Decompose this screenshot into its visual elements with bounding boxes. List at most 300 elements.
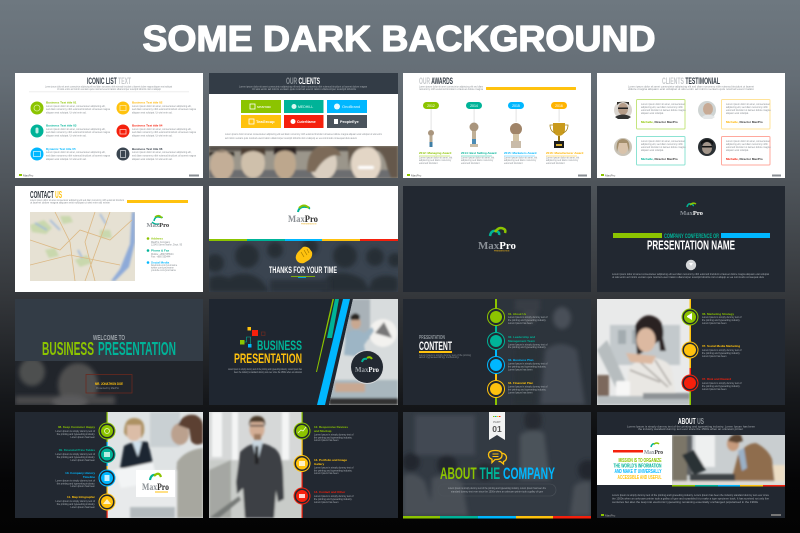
- panel: business presentation: [209, 299, 398, 405]
- mission panel: MISSION IS TO ORGANIZE: [618, 458, 662, 464]
- heading: business: BUSINESS: [257, 337, 302, 353]
- item 04: Lorem Ipsum is simply dummy text of: [508, 386, 548, 388]
- list item: teal: [30, 124, 111, 138]
- item 10: 10. Company History: [65, 471, 95, 475]
- award 2012: euismod tincidunt: [419, 162, 438, 165]
- item 11: Lorem Ipsum is simply dummy text of: [56, 500, 95, 503]
- list item: dark: aliquam erat volutpat. Ut wisi enim ad.: [132, 158, 173, 161]
- body text: Lorem Ipsum is simply dummy text of the printing and typesetting industry. Lorem Ipsum has: [228, 368, 303, 371]
- testimonial: blonde woman: aliquam erat volutpat.: [641, 149, 664, 152]
- item 10: the printing and typesetting industry.: [57, 482, 95, 486]
- intro text: Lorem ipsum dolor sit amet consectetur adipiscing elit sed diam nonummy nibh euismod tincidunt ut laoreet dolore magna aliquam erat volutpat: [45, 86, 172, 88]
- intro text: [239, 86, 368, 91]
- icon: circle badge: [686, 260, 696, 270]
- client logos: OnoBrand: [342, 104, 360, 109]
- logo badge: [350, 350, 384, 384]
- award 2015: Lorem ipsum dolor sit amet, elit: [504, 156, 538, 160]
- item 13: the printing and typesetting industry.: [314, 470, 353, 472]
- item 02: the printing and typesetting industry.: [508, 346, 547, 349]
- list item: green: [30, 100, 111, 114]
- item 13: Lorem Ipsum has been: [314, 472, 339, 475]
- colour strip: [403, 516, 591, 518]
- colour strip: [672, 485, 785, 486]
- mission panel: MaxPro: [644, 450, 663, 456]
- testimonial: man drinking: Michelle, Director MaxPro: [726, 120, 763, 124]
- item 03: Lorem Ipsum is simply dummy text of: [508, 362, 548, 366]
- award 2015: 2015: [512, 104, 520, 108]
- intro text: Lorem ipsum dolor sit amet consectetur adipiscing elit sed diam nonummy nibh euismod tincidunt ut laoreet: [628, 86, 754, 88]
- timeline line: [495, 299, 497, 405]
- client logos: seamac: [257, 104, 271, 109]
- icon: chat bubbles: [488, 450, 506, 464]
- contact details: youtube.com/yourname: [151, 269, 177, 272]
- photo: meeting background: [402, 409, 598, 516]
- logo box: MaxPro: [142, 482, 169, 492]
- list item: red: [116, 124, 197, 138]
- heading: about us: ABOUT US: [678, 417, 704, 426]
- item 11: 11. Map Infographic: [67, 495, 95, 499]
- title: SOME DARK BACKGROUND: [142, 18, 656, 59]
- panel: about the company: [402, 409, 598, 518]
- logo: maxpro: [146, 216, 169, 229]
- list item: dark: Business Text title 06: [132, 147, 163, 151]
- award 2016: [546, 102, 584, 165]
- logo: maxpro: MaxPro: [478, 241, 516, 252]
- logo box: [136, 470, 175, 497]
- icon: clapping hands: [296, 247, 312, 263]
- heading: contact us: CONTACT US: [30, 190, 62, 201]
- item 01: [488, 308, 548, 326]
- mission panel: THE WORLD'S INFORMATION: [614, 464, 662, 470]
- testimonial: dark portrait man: euismod tincidunt ut laoreet dolore magna: [726, 146, 771, 149]
- photo: man on phone with laptop: [672, 434, 785, 485]
- intro text: [628, 86, 755, 91]
- award 2016: 2016: Manufacturer Award: [546, 151, 584, 155]
- intro text: [30, 199, 124, 204]
- award 2014: 2014: [470, 104, 478, 108]
- item 10: [56, 470, 115, 488]
- testimonial: dark portrait man: [698, 136, 771, 165]
- testimonial: dark portrait man: aliquam erat volutpat.: [726, 149, 749, 152]
- item 07: [682, 342, 742, 358]
- panel: contact us: [15, 186, 203, 292]
- heading: iconic list text: ICONIC LIST TEXT: [87, 76, 131, 86]
- contact details: [147, 236, 183, 272]
- item 07: 07. Social Media Marketing: [702, 344, 740, 348]
- item 10: Lorem Ipsum has been: [71, 485, 96, 488]
- award 2016: adipiscing sed diam nonummy: [546, 159, 579, 162]
- footer logo: MaxPro: [605, 174, 616, 178]
- panel: logo slide: [403, 186, 591, 292]
- list item: red: Business Text title 04: [132, 124, 163, 128]
- logo: maxpro: MaxPro: [146, 222, 169, 229]
- panel: iconic list text: [15, 73, 203, 178]
- item 10: Timeline: [83, 475, 95, 479]
- award 2015: 2015: Marketers Award: [504, 151, 537, 155]
- item 06: [682, 309, 742, 325]
- item 06: Lorem Ipsum has been: [702, 322, 727, 325]
- divider line: [106, 412, 108, 518]
- logo: maxpro: PRESENTATION: [301, 222, 317, 226]
- intro text: Ut wisi enim ad minim veniam quis nostrud exerci tation ullamcorper suscipit lobortis nisl ut aliquip: [57, 88, 162, 91]
- icon: squares: [240, 327, 265, 348]
- item 13: Gallery: [314, 462, 325, 466]
- award 2012: 2012: Managing Award: [419, 151, 452, 155]
- body text: the 1500s when an unknown printer took a galley of type and scrambled it to make a type specimen book. It has survived not only five: [612, 498, 770, 500]
- award 2012: 2012: [427, 104, 435, 108]
- panel: about us: [597, 412, 785, 518]
- intro text: [45, 86, 172, 91]
- contact details: Fax: +880 555444: [151, 256, 171, 258]
- contact details: 12345 Street Name, Dept. 95: [151, 244, 183, 246]
- item 08: the printing and typesetting industry.: [702, 385, 741, 388]
- panel: clients testimonial: [597, 73, 785, 178]
- testimonial: man with glasses: aliquam erat volutpat.: [641, 112, 664, 115]
- list item: yellow: Lorem ipsum dolor sit amet, consectetuer adipiscing elit,: [132, 105, 192, 108]
- list item: red: aliquam erat volutpat. Ut wisi enim ad.: [132, 134, 173, 138]
- heading: presentation content: [419, 335, 472, 359]
- testimonial: man with glasses: euismod tincidunt ut laoreet dolore magna: [641, 109, 686, 112]
- logo: maxpro: PRESENTATION: [494, 250, 510, 252]
- contact details: facebook.com/yourname: [151, 264, 178, 267]
- heading: presentation content: Lorem Ipsum is simply dummy text of the printing: [419, 354, 472, 357]
- item 14: Lorem Ipsum is simply dummy text of: [314, 495, 354, 498]
- footer logo: MaxPro: [411, 174, 422, 178]
- logo: maxpro: [680, 203, 703, 217]
- heading: thanks: THANKS FOR YOUR TIME: [269, 265, 337, 276]
- item 01: 01. About Us: [508, 312, 527, 316]
- list item: green: Business Text title 01: [46, 100, 77, 104]
- text: welcome to: WELCOME TO: [93, 333, 125, 342]
- client logos: MEDHILL: [298, 105, 313, 109]
- list item: green: Lorem ipsum dolor sit amet, consectetuer adipiscing elit,: [46, 105, 106, 108]
- item 02: 02. Leadership and: [508, 335, 535, 339]
- testimonial: man drinking: euismod tincidunt ut laoreet dolore magna: [726, 109, 771, 112]
- item 03: 03. Business Plan: [508, 358, 534, 362]
- item 03: [488, 356, 548, 374]
- panel: responsive devices: [209, 412, 398, 518]
- award 2015: euismod tincidunt: [504, 162, 523, 165]
- photo: businessman: [209, 412, 302, 518]
- divider line: [302, 412, 303, 518]
- list item: blue: [30, 147, 111, 161]
- panel: thanks for your time: [206, 186, 402, 292]
- contact details: Social Media: [151, 260, 170, 264]
- list item: blue: Lorem ipsum dolor sit amet, consectetuer adipiscing elit,: [46, 151, 106, 154]
- presenter box: MR. JONATHON DOE: [95, 382, 123, 386]
- list item: teal: sed diam nonummy nibh euismod tincidunt ut laoreet magna: [46, 131, 111, 134]
- item 08: [56, 423, 115, 439]
- item 08: [682, 375, 742, 391]
- bar: blue: [721, 233, 770, 238]
- panel: welcome: [15, 299, 203, 409]
- award 2012: adipiscing sed diam nonummy: [419, 159, 452, 162]
- panel: presentation content: [403, 299, 591, 405]
- item 11: [56, 494, 115, 510]
- mission panel: ACCESSIBLE AND USEFUL: [618, 475, 662, 481]
- logo: maxpro: MaxPro: [680, 210, 703, 217]
- logo badge: MaxPro: [355, 366, 379, 374]
- item 02: [488, 332, 548, 350]
- panel: our awards: [403, 73, 591, 178]
- mission panel: AND MAKE IT UNIVERSALLY: [614, 469, 662, 475]
- award 2012: Lorem ipsum dolor sit amet, elit: [419, 156, 453, 160]
- testimonial: man drinking: adipiscing elit, sed diam nonummy nibh: [726, 106, 768, 109]
- award 2014: Lorem ipsum dolor sit amet, elit: [461, 156, 495, 160]
- logo: maxpro: [478, 228, 516, 252]
- intro text: [419, 86, 484, 91]
- item 12: [294, 423, 354, 442]
- text pill: [438, 484, 556, 496]
- testimonial: dark portrait man: Lorem ipsum dolor sit amet, consectetuer: [726, 140, 770, 143]
- heading: about the company: ABOUT THE COMPANY: [440, 464, 555, 483]
- body text: [228, 368, 303, 374]
- contact details: twitter.com/yourname: [151, 266, 174, 270]
- contact details: Phone & Fax: [151, 248, 170, 252]
- item 09: 09. Financial Price Tables: [59, 448, 95, 452]
- intro text: Lorem Ipsum is simply dummy text of the printing and typesetting industry. Lorem Ipsum has been: [627, 426, 756, 428]
- testimonial: dark portrait man: Michelle, Director MaxPro: [726, 157, 763, 161]
- testimonial: man with glasses: adipiscing elit, sed diam nonummy nibh: [641, 106, 683, 109]
- item 11: Lorem Ipsum has been: [71, 506, 96, 509]
- item 10: Lorem Ipsum is simply dummy text of: [56, 480, 95, 482]
- item 08: Lorem Ipsum is simply dummy text of: [702, 382, 742, 385]
- photo: woman at desk: [597, 299, 690, 405]
- list item: green: sed diam nonummy nibh euismod tincidunt ut laoreet magna: [46, 108, 111, 111]
- map: [30, 212, 135, 281]
- bar: green: [613, 233, 662, 238]
- testimonial: blonde woman: Lorem ipsum dolor sit amet, consectetuer: [641, 140, 685, 143]
- heading: our awards: OUR AWARDS: [419, 76, 453, 86]
- award 2015: [504, 102, 538, 165]
- item 13: [294, 456, 354, 475]
- intro text: Ut wisi enim ad minim veniam quis nostrud exerci tation ullamcorper suscipit lobortis: [252, 88, 357, 91]
- presenter box: [86, 374, 132, 393]
- contact details: MaxPro Company: [151, 241, 171, 244]
- intro text: nonummy nibh euismod tincidunt ut laoreet dolore magna: [419, 88, 484, 91]
- list item: yellow: [116, 100, 197, 114]
- body text: been the industry's standard dummy text ever since the 1500s when an unknown: [234, 371, 303, 374]
- award 2016: Lorem ipsum dolor sit amet, elit: [546, 156, 580, 160]
- client logos: CuterName: [297, 120, 316, 124]
- item 13: 13. Portfolio and Image: [314, 458, 347, 462]
- photo: thinking man: [15, 361, 117, 405]
- testimonial: man drinking: aliquam erat volutpat.: [726, 112, 749, 115]
- heading: clients testimonial: CLIENTS TESTIMONIAL: [662, 76, 720, 86]
- testimonial: man drinking: [698, 100, 771, 129]
- footer logo: MaxPro: [23, 174, 34, 178]
- body text: Lorem ipsum dolor sit amet consectetuer adipiscing elit sed diam nonummy nibh euismod tincidunt ut laoreet dolore magna aliquam erat volutpat: [612, 273, 769, 276]
- client logos: TeaGroup: [256, 119, 275, 124]
- item 03: Lorem Ipsum has been: [508, 368, 533, 372]
- yellow title bar: [486, 87, 576, 90]
- stripe: green: [316, 299, 334, 372]
- item 08: Lorem Ipsum has been: [71, 436, 96, 439]
- panel: customers meeting: [15, 412, 203, 518]
- item 12: Lorem Ipsum has been: [314, 439, 339, 442]
- testimonial: dark portrait man: adipiscing elit, sed diam nonummy nibh: [726, 143, 768, 146]
- testimonial: blonde woman: euismod tincidunt ut laoreet dolore magna: [641, 146, 686, 149]
- contact details: Address: [151, 236, 163, 240]
- item 06: the printing and typesetting industry.: [702, 319, 741, 322]
- body text: Lorem Ipsum is simply dummy text of the printing and typesetting industry. Lorem Ipsum has been the industry standard dummy text ever since: [612, 494, 770, 497]
- list item: dark: sed diam nonummy nibh euismod tincidunt ut laoreet magna: [132, 154, 197, 158]
- item 12: 12. Responsive Devices: [314, 425, 348, 429]
- list item: teal: Lorem ipsum dolor sit amet, consectetuer adipiscing elit,: [46, 128, 106, 131]
- item 04: [488, 380, 548, 398]
- panel: marketing strategy: [597, 299, 785, 405]
- testimonial: man with glasses: Lorem ipsum dolor sit amet, consectetuer: [641, 103, 685, 106]
- panel: presentation name: [597, 186, 785, 292]
- item 07: the printing and typesetting industry.: [702, 352, 741, 355]
- item 06: 06. Marketing Strategy: [702, 312, 734, 316]
- item 04: the printing and typesetting industry.: [508, 388, 547, 392]
- item 02: Management Team: [508, 339, 535, 343]
- heading: our clients: OUR CLIENTS: [286, 76, 320, 86]
- item 08: 07. Risk and Reward: [702, 377, 731, 381]
- item 09: [56, 446, 115, 462]
- award 2014: 2014: Best Selling Award: [461, 151, 497, 155]
- item 11: the printing and typesetting industry.: [57, 503, 95, 506]
- intro text: ut laoreet dolore magna aliquam erat volutpat ut wisi enim ad minim: [30, 202, 110, 204]
- stripe: teal: [327, 299, 339, 338]
- intro text: dolore magna aliquam erat volutpat ut wisi enim ad minim veniam quis nostrud exerci tation: [628, 88, 755, 91]
- item 01: the printing and typesetting industry.: [508, 319, 547, 322]
- list item: yellow: sed diam nonummy nibh euismod tincidunt ut laoreet magna: [132, 108, 197, 111]
- photo: audience: [206, 239, 402, 292]
- testimonial: blonde woman: [614, 136, 686, 165]
- award 2014: adipiscing sed diam nonummy: [461, 159, 494, 162]
- mission panel: [597, 435, 672, 485]
- heading: presentation: PRESENTATION: [98, 339, 176, 359]
- list item: green: aliquam erat volutpat. Ut wisi enim ad.: [46, 112, 87, 114]
- item 01: Lorem Ipsum has been: [508, 322, 533, 325]
- text pill: Lorem Ipsum is simply dummy text of the printing and typesetting industry. Lorem Ipsum has been the: [448, 487, 547, 490]
- item 08: the printing and typesetting industry.: [57, 433, 95, 436]
- heading: presentation: PRESENTATION: [234, 350, 302, 366]
- photo: presenter: [329, 299, 398, 405]
- item 14: the printing and typesetting industry.: [314, 498, 353, 501]
- award 2016: 2016: [555, 104, 563, 108]
- yellow title bar: [127, 200, 188, 203]
- body text: centuries but also the leap into electronic typesetting remaining essentially unchanged popularised in the 1960s: [612, 501, 759, 504]
- testimonial: blonde woman: adipiscing elit, sed diam nonummy nibh: [641, 143, 683, 146]
- award 2016: euismod tincidunt: [546, 162, 565, 165]
- list item: blue: Dynamic Text title 05: [46, 147, 76, 151]
- underline: [291, 276, 315, 278]
- award 2014: [461, 102, 497, 165]
- item 09: the printing and typesetting industry.: [57, 456, 95, 459]
- item 07: Lorem Ipsum has been: [702, 355, 727, 358]
- item 12: the printing and typesetting industry.: [314, 436, 353, 440]
- colour strip: [209, 239, 398, 241]
- ribbon: [489, 412, 505, 440]
- heading: presentation content: and typesetting industry: [419, 356, 460, 359]
- testimonial: man with glasses: [614, 100, 686, 129]
- item 13: Lorem Ipsum is simply dummy text of: [314, 466, 354, 470]
- item 09: Lorem Ipsum is simply dummy text of: [56, 453, 95, 456]
- intro text: the industry standard dummy text ever since the 1500s when an unknown printer: [638, 428, 743, 431]
- item 08: 08. Keep Customer Happy: [58, 425, 95, 429]
- heading: presentation content: PRESENTATION: [419, 335, 445, 341]
- item 07: Lorem Ipsum is simply dummy text of: [702, 349, 742, 352]
- ribbon: 01: [492, 424, 502, 434]
- item 14: [294, 488, 354, 504]
- item 12: Lorem Ipsum is simply dummy text of: [314, 434, 354, 436]
- body text: [612, 273, 769, 279]
- award 2015: adipiscing sed diam nonummy: [504, 159, 537, 162]
- item 02: Lorem Ipsum is simply dummy text of: [508, 344, 548, 346]
- ribbon: PART: [493, 420, 501, 424]
- intro text: Lorem ipsum dolor sit amet consectetur adipiscing elit sed diam: [419, 86, 483, 88]
- list item: red: sed diam nonummy nibh euismod tincidunt ut laoreet magna: [132, 131, 197, 134]
- footer logo: MaxPro: [605, 514, 616, 518]
- testimonial: blonde woman: Michelle, Director MaxPro: [641, 157, 678, 161]
- item 08: Lorem Ipsum has been: [702, 388, 727, 391]
- body text: ut wisi enim ad minim veniam quis nostrud exerci tation ullamcorper suscipit lobortis nisl ut aliquip ex ea commodo consequat duis: [612, 276, 765, 279]
- item 08: Lorem Ipsum is simply dummy text of: [56, 430, 95, 433]
- item 06: Lorem Ipsum is simply dummy text of: [702, 316, 742, 319]
- item 14: 14. Contact and Other: [314, 490, 346, 494]
- heading: business: BUSINESS: [42, 339, 94, 359]
- body text: [225, 133, 382, 140]
- item 01: Lorem Ipsum is simply dummy text of: [508, 316, 548, 319]
- award 2014: euismod tincidunt: [461, 162, 480, 165]
- item 12: and Mockup: [314, 429, 332, 433]
- list item: red: Lorem ipsum dolor sit amet, consectetuer adipiscing elit,: [132, 128, 192, 131]
- panel: our clients: [209, 73, 398, 182]
- presenter box: Presented by MaxPro: [96, 387, 120, 390]
- divider line: [690, 299, 691, 405]
- contact details: Mobile: +880 555544: [151, 253, 174, 256]
- body text: Lorem ipsum dolor sit amet consectetuer adipiscing elit sed diam nonummy nibh euismod tincidunt ut laoreet dolore magna aliquam erat volutpat ut wisi enim: [225, 133, 382, 136]
- award 2012: [419, 102, 453, 165]
- heading: PRESENTATION NAME: [647, 238, 735, 252]
- list item: yellow: Business Text title 02: [132, 100, 163, 104]
- client logos: PeopleEye: [340, 120, 359, 124]
- body text: ad minim veniam quis nostrud exerci tation ullamcorper suscipit lobortis nisl ut aliquip ex ea commodo consequat duis autem: [225, 137, 357, 140]
- intro text: Lorem ipsum dolor sit amet consectetur adipiscing elit sed diam nonummy nibh euismod tincidunt ut laoreet dolore magna: [239, 86, 368, 88]
- text pill: standard dummy text ever since the 1500s when an unknown printer took a galley of type: [451, 490, 544, 494]
- item 09: Lorem Ipsum has been: [71, 459, 96, 462]
- list item: yellow: aliquam erat volutpat. Ut wisi enim ad.: [132, 112, 173, 114]
- list item: dark: Lorem ipsum dolor sit amet, consectetuer adipiscing elit,: [132, 151, 192, 154]
- list item: blue: sed diam nonummy nibh euismod tincidunt ut laoreet magna: [46, 154, 111, 158]
- client logos: [241, 100, 367, 128]
- item 14: Lorem Ipsum has been: [314, 501, 339, 504]
- subheading: COMPANY CONFERENCE OR: [664, 234, 719, 240]
- body text: [612, 494, 770, 504]
- logo: maxpro: [288, 206, 318, 226]
- intro text: [627, 426, 756, 431]
- stripe: blue: [317, 299, 350, 405]
- photo: team faces: [209, 146, 398, 178]
- list item: teal: Business Text title 03: [46, 124, 77, 128]
- list item: blue: aliquam erat volutpat. Ut wisi enim ad.: [46, 158, 87, 161]
- testimonial: man with glasses: Michelle, Director MaxPro: [641, 120, 678, 124]
- logo: maxpro: MaxPro: [288, 214, 318, 224]
- photo: team background: [496, 299, 591, 405]
- photo: business meeting: [107, 412, 203, 518]
- testimonial: man drinking: Lorem ipsum dolor sit amet, consectetuer: [726, 103, 770, 106]
- heading: presentation content: CONTENT: [419, 341, 452, 353]
- item 04: 04. Financial Plan: [508, 381, 533, 385]
- list item: teal: aliquam erat volutpat. Ut wisi enim ad.: [46, 134, 87, 138]
- intro text: Lorem ipsum dolor sit amet consectetur adipiscing elit sed diam nonummy nibh euismod tincidunt: [30, 199, 124, 202]
- item 03: the printing and typesetting industry.: [508, 366, 547, 368]
- list item: dark: [116, 147, 197, 161]
- item 04: Lorem Ipsum has been: [508, 392, 533, 394]
